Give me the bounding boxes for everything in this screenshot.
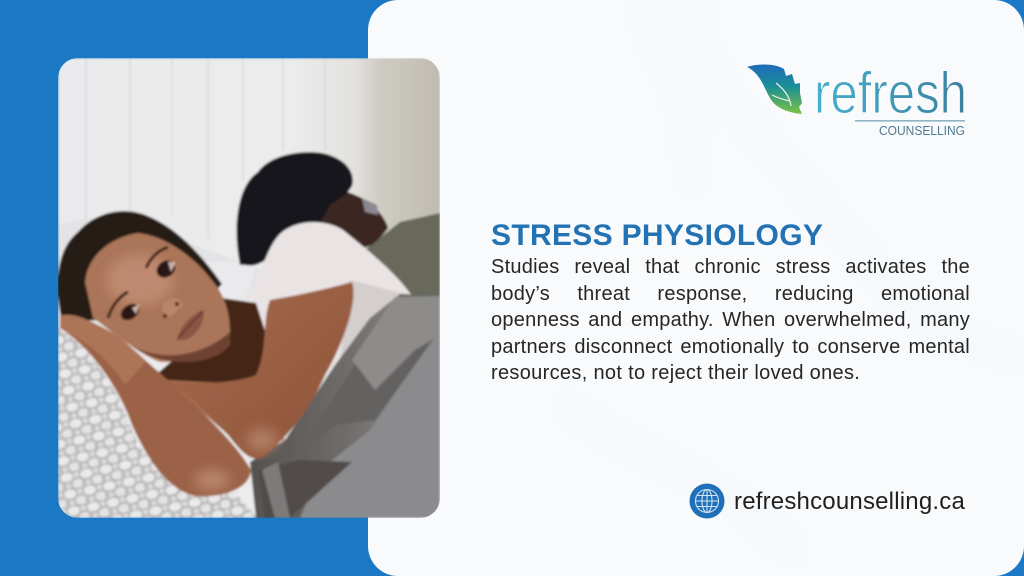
body text block: body’s threat response, reducing emotional xyxy=(491,282,970,304)
blanket xyxy=(250,294,440,518)
woman: face xyxy=(85,233,230,362)
body text block: openness and empathy. When overwhelmed, many xyxy=(491,309,970,331)
panel: white content card xyxy=(368,0,1024,576)
woman: lower arm xyxy=(60,314,251,496)
woman: t-shirt xyxy=(252,220,412,324)
photo: woman lying awake in bed beside partner xyxy=(58,58,440,518)
body text block: Studies reveal that chronic stress activates the xyxy=(491,256,970,278)
body text block: resources, not to reject their loved ones. xyxy=(491,362,860,384)
partner: hair xyxy=(237,152,353,265)
partner: face and neck xyxy=(318,190,389,249)
woman: upper arm xyxy=(168,282,353,459)
website url: refreshcounselling.ca xyxy=(734,488,965,515)
woman: hand under head xyxy=(60,315,145,385)
logo: refresh counselling xyxy=(747,61,967,138)
pillow xyxy=(58,328,257,518)
heading: STRESS PHYSIOLOGY xyxy=(491,219,823,252)
woman: hair xyxy=(58,211,222,322)
woman: neck and chest xyxy=(158,297,267,384)
bed linen xyxy=(194,246,258,298)
icon: globe xyxy=(690,484,724,518)
logo tagline: COUNSELLING xyxy=(879,124,965,138)
body text block: partners disconnect emotionally to conserve mental xyxy=(491,336,970,358)
woman: eyes, brows, nose, lips xyxy=(108,247,204,340)
body text block xyxy=(491,256,970,384)
wall xyxy=(58,58,440,518)
logo leaf icon xyxy=(747,65,802,114)
partner: olive shirt xyxy=(366,212,440,298)
